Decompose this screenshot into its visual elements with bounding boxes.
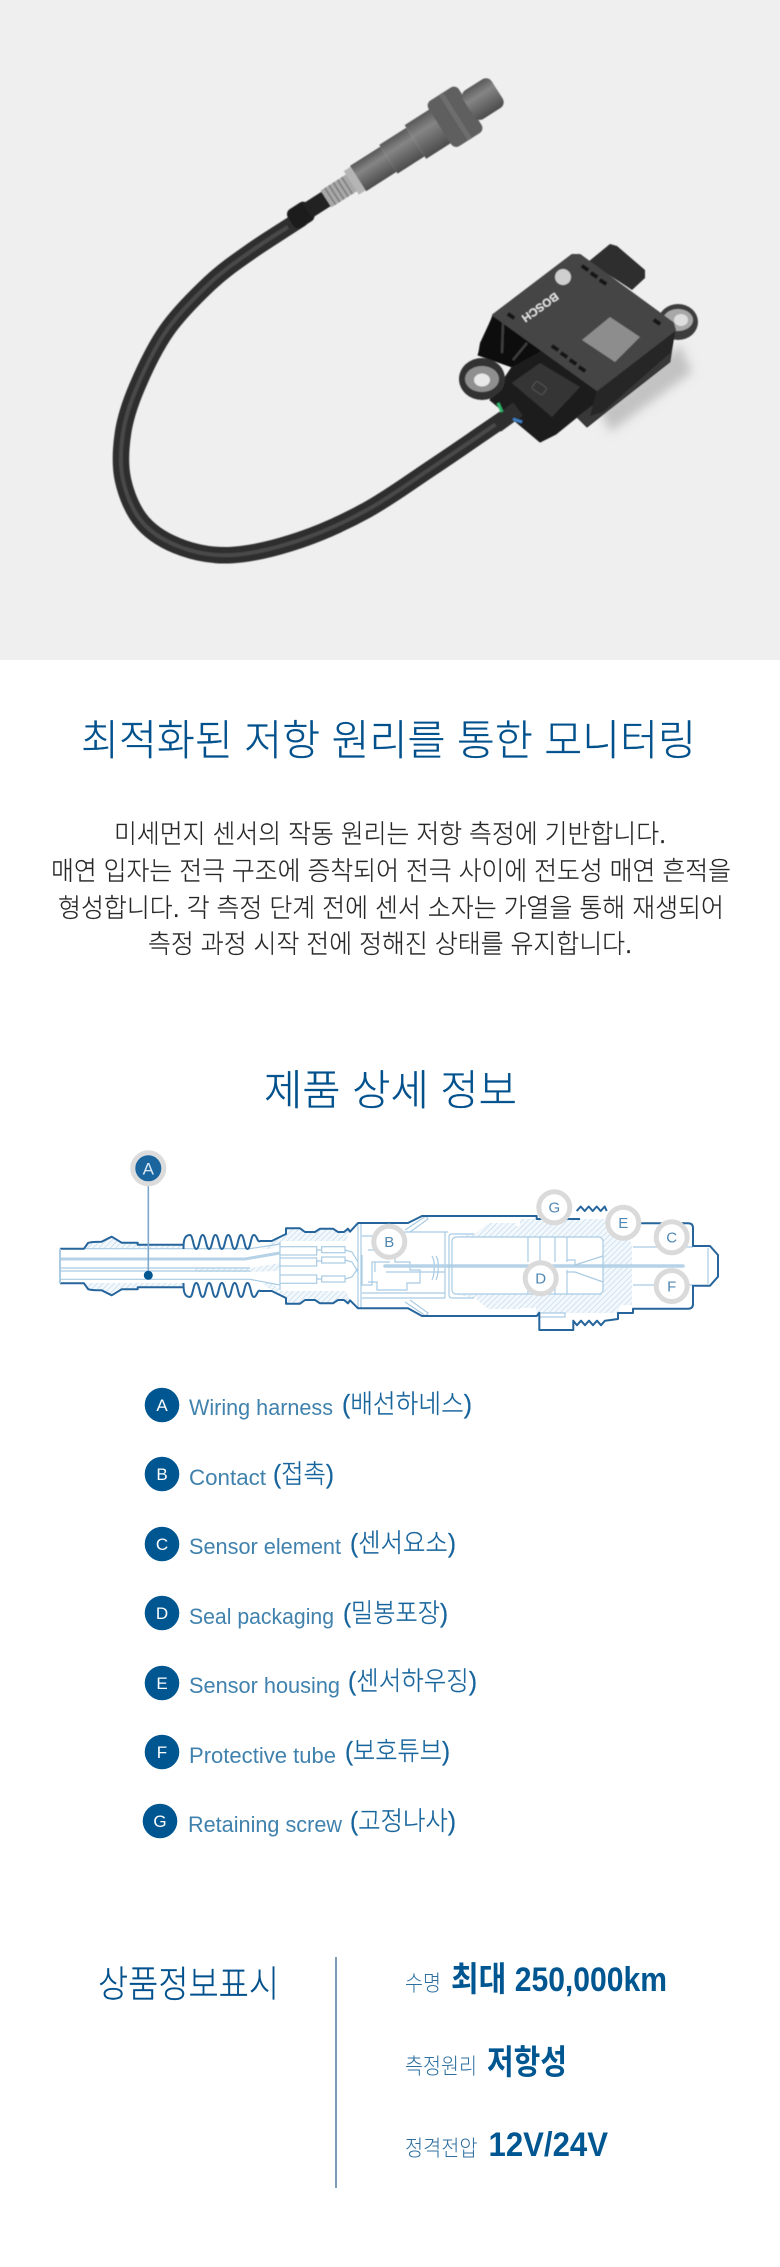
hatched regions: [86, 1219, 632, 1313]
callout C: [656, 1222, 687, 1253]
text block: description: 매연 입자는 전극 구조에 증착되어 전극 사이에 전도성 매연 흔적을: [51, 856, 731, 886]
legend item F: F: [157, 1743, 167, 1762]
callout F: F: [667, 1278, 676, 1295]
base plate: [577, 345, 672, 427]
outer contour: [60, 1237, 184, 1249]
callout B: [374, 1226, 405, 1257]
lower bellows: [184, 1283, 260, 1297]
soft shadow under control unit: [600, 345, 692, 432]
legend item A: Wiring harness: [189, 1395, 333, 1420]
legend item F: Protective tube: [189, 1743, 336, 1768]
left open side: [478, 315, 547, 367]
callout E: [608, 1207, 639, 1238]
legend item E: Sensor housing: [189, 1673, 340, 1698]
panel: product photo: [0, 0, 780, 660]
spec: lifetime: 최대 250,000km: [451, 1961, 667, 1999]
plug front collar: [490, 385, 552, 442]
legend item A: A: [156, 1396, 168, 1415]
cable entry into plug: [496, 409, 518, 425]
legend item G: [143, 1804, 456, 1838]
legend item A: (배선하네스): [342, 1389, 472, 1419]
cable: [121, 218, 505, 555]
callout A: [133, 1153, 164, 1280]
spec: measuring principle: 측정원리: [405, 2054, 477, 2079]
legend list: [143, 1388, 477, 1838]
diagram: sensor cross-section: [60, 1153, 718, 1330]
legend item C: C: [156, 1535, 168, 1554]
BOSCH wordmark: BOSCH: [519, 290, 560, 324]
vertical divider: [335, 1957, 337, 2188]
heading: product details: 제품 상세 정보: [264, 1067, 517, 1114]
callout G: G: [548, 1200, 560, 1217]
right wall: [590, 330, 675, 416]
text block: description: [51, 819, 731, 959]
callout D: [525, 1263, 556, 1294]
right contour: [260, 1206, 718, 1330]
green wire: [498, 403, 502, 412]
legend item B: Contact: [189, 1465, 266, 1490]
text block: description: 형성합니다. 각 측정 단계 전에 센서 소자는 가열을 통해 재생되어: [58, 893, 724, 923]
spec: measuring principle: 저항성: [487, 2044, 567, 2082]
legend item G: (고정나사): [350, 1806, 456, 1836]
callout A: A: [143, 1160, 155, 1178]
legend item D: D: [156, 1604, 168, 1623]
callout D: D: [535, 1271, 546, 1288]
legend item E: [145, 1666, 477, 1700]
legend item D: [145, 1596, 448, 1630]
inner tubes and wires: [60, 1216, 708, 1317]
legend item G: Retaining screw: [188, 1812, 342, 1837]
legend item C: [145, 1527, 456, 1561]
blue wire: [513, 419, 522, 422]
notches: [507, 264, 661, 373]
spec: lifetime: 수명: [405, 1971, 441, 1996]
side ribs: [502, 323, 527, 360]
unit silhouette: [478, 255, 675, 442]
BOSCH logo mark: [555, 269, 571, 285]
callout C: C: [666, 1230, 677, 1247]
legend item A: [145, 1388, 472, 1422]
callout G: [539, 1192, 570, 1223]
grey window: [582, 317, 640, 362]
text block: description: 미세먼지 센서의 작동 원리는 저항 측정에 기반합니다.: [114, 819, 666, 849]
callout E: E: [618, 1215, 628, 1232]
spec: rated voltage: [405, 2126, 608, 2164]
heading: monitoring: 최적화된 저항 원리를 통한 모니터링: [81, 717, 696, 764]
top face: [493, 255, 675, 390]
spec: rated voltage: 12V/24V: [488, 2126, 608, 2164]
legend item F: (보호튜브): [345, 1736, 450, 1766]
callout F: [656, 1270, 687, 1302]
legend item B: (접촉): [273, 1459, 334, 1489]
plug latch mark: [531, 381, 547, 396]
legend item E: E: [156, 1674, 168, 1693]
top connector: [588, 244, 645, 290]
left mounting ear: [459, 358, 505, 400]
text block: description: 측정 과정 시작 전에 정해진 상태를 유지합니다.: [148, 929, 632, 959]
spec: rated voltage: 정격전압: [405, 2136, 478, 2161]
panel: product information: [98, 1957, 667, 2188]
legend item C: (센서요소): [350, 1528, 456, 1558]
plug top: [512, 363, 580, 417]
spec: measuring principle: [405, 2044, 567, 2082]
legend item G: G: [153, 1812, 167, 1831]
legend item D: Seal packaging: [189, 1604, 334, 1629]
right mounting ear: [658, 304, 698, 340]
plug right side: [540, 390, 583, 442]
legend item B: B: [156, 1465, 168, 1484]
photo: sensor and control unit: [121, 67, 698, 555]
sensor probe: [276, 67, 512, 244]
legend item F: [145, 1735, 450, 1769]
heading: product information: 상품정보표시: [98, 1964, 279, 2005]
legend item E: (센서하우징): [348, 1666, 477, 1696]
upper bellows: [184, 1235, 260, 1249]
callout B: B: [384, 1234, 394, 1251]
legend item B: [145, 1457, 334, 1491]
legend item D: (밀봉포장): [343, 1598, 448, 1628]
legend item C: Sensor element: [189, 1534, 341, 1559]
control unit: [459, 244, 698, 442]
